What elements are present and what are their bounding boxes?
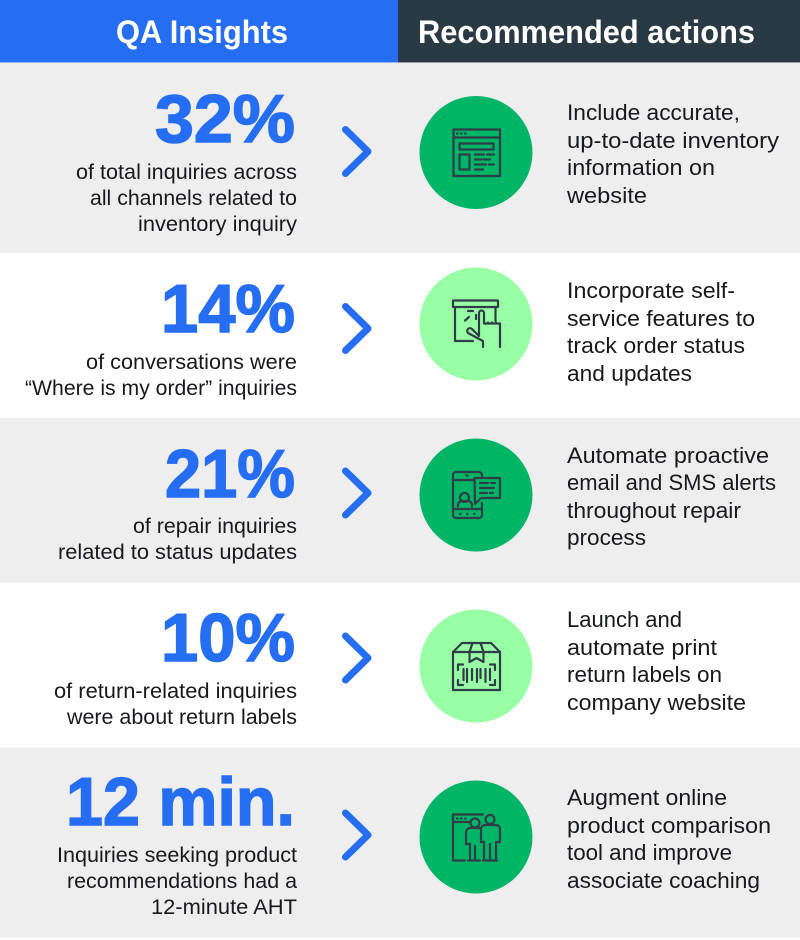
insight text 2: “Where is my order” inquiries bbox=[25, 376, 297, 400]
action text 4: Launch and bbox=[567, 607, 682, 632]
row 4 panel bbox=[54, 600, 746, 729]
action text 1: Include accurate, bbox=[567, 100, 740, 125]
action text 2 bbox=[567, 278, 755, 386]
arrow 2 bbox=[346, 306, 368, 350]
insight text 3: of repair inquiries bbox=[133, 514, 297, 538]
insight text 4: of return-related inquiries bbox=[54, 679, 297, 703]
insight text 2 bbox=[25, 350, 297, 400]
arrow 3 bbox=[346, 471, 368, 515]
row 2 panel bbox=[25, 268, 755, 400]
insight text 1: of total inquiries across bbox=[76, 160, 297, 184]
row 3 panel bbox=[0, 418, 800, 582]
stat: 21%: 21% bbox=[165, 436, 295, 512]
icon: website layout bbox=[420, 96, 532, 209]
action text 5: associate coaching bbox=[567, 868, 760, 893]
insight text 5 bbox=[57, 843, 297, 919]
action text 1: information on bbox=[567, 155, 715, 180]
header: QA Insights: QA Insights bbox=[116, 14, 288, 50]
arrow 4 bbox=[346, 636, 368, 680]
insight text 3 bbox=[58, 514, 297, 564]
action text 2: track order status bbox=[567, 333, 745, 358]
insight text 1: all channels related to bbox=[90, 186, 297, 210]
action text 4: return labels on bbox=[567, 662, 722, 687]
stat: 12 min.: 12 min. bbox=[66, 764, 295, 840]
action text 2: and updates bbox=[567, 361, 692, 386]
action text 4: automate print bbox=[567, 635, 718, 660]
stat: 14%: 14% bbox=[161, 271, 295, 347]
action text 2: Incorporate self- bbox=[567, 278, 735, 303]
insight text 5: Inquiries seeking product bbox=[57, 843, 297, 867]
insight text 1: inventory inquiry bbox=[138, 212, 297, 236]
icon: touch screen bbox=[420, 268, 532, 380]
insight text 4 bbox=[54, 679, 297, 729]
row 1 panel bbox=[0, 63, 800, 253]
insight text 2: of conversations were bbox=[86, 350, 297, 374]
action text 4 bbox=[567, 607, 746, 715]
action text 1: website bbox=[566, 183, 647, 208]
action text 5: product comparison bbox=[567, 813, 771, 838]
action text 3 bbox=[567, 443, 776, 550]
action text 5: tool and improve bbox=[567, 840, 732, 865]
stat: 32%: 32% bbox=[155, 81, 295, 157]
icon: barcode box bbox=[420, 610, 532, 722]
action text 1: up-to-date inventory bbox=[567, 128, 780, 153]
icon: associate and customer bbox=[420, 780, 532, 894]
header: QA Insights bbox=[0, 0, 398, 62]
insight text 1 bbox=[76, 160, 297, 236]
action text 3: email and SMS alerts bbox=[567, 470, 776, 495]
action text 5: Augment online bbox=[567, 785, 727, 810]
header: Recommended actions bbox=[398, 0, 800, 62]
row 5 panel bbox=[0, 748, 800, 938]
action text 2: service features to bbox=[567, 306, 755, 331]
action text 3: Automate proactive bbox=[567, 443, 769, 468]
action text 3: throughout repair bbox=[567, 498, 742, 523]
action text 3: process bbox=[567, 525, 646, 550]
insight text 5: recommendations had a bbox=[67, 869, 297, 893]
stat: 10%: 10% bbox=[161, 600, 295, 676]
header: Recommended actions: Recommended actions bbox=[418, 14, 755, 50]
icon: phone and chat bbox=[420, 438, 532, 552]
action text 1 bbox=[566, 100, 780, 208]
arrow 1 bbox=[346, 130, 368, 174]
insight text 4: were about return labels bbox=[66, 705, 297, 729]
insight text 5: 12-minute AHT bbox=[151, 895, 297, 919]
arrow 5 bbox=[346, 813, 368, 857]
insight text 3: related to status updates bbox=[58, 540, 297, 564]
action text 5 bbox=[567, 785, 771, 893]
action text 4: company website bbox=[567, 690, 746, 715]
